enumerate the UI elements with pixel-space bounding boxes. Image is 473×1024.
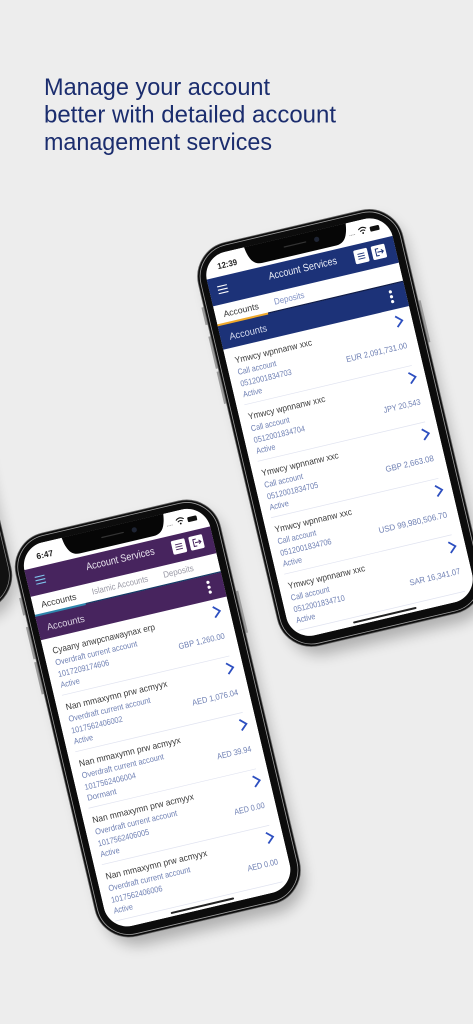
row 3	[259, 428, 439, 518]
row 2: JPY 20,543	[382, 396, 422, 415]
icon: status wifi and battery	[166, 514, 198, 528]
row 5: Call account	[290, 584, 331, 603]
row 5	[286, 541, 466, 631]
phone: blue account services	[188, 202, 473, 664]
icon: menu	[35, 575, 46, 584]
header title: Account Services	[85, 545, 156, 573]
icon: menu	[217, 285, 228, 294]
tab shadow line	[85, 571, 221, 604]
accounts section band	[35, 572, 227, 640]
phone body	[8, 493, 307, 944]
icon: logout button	[188, 534, 205, 551]
row 4: Active	[282, 554, 303, 569]
row 5: Active	[295, 611, 317, 625]
section label: Accounts	[46, 614, 86, 633]
row 3: Dormant	[86, 786, 118, 803]
phone body	[191, 202, 473, 654]
tab: accounts active: Accounts	[222, 301, 260, 319]
row 3	[77, 718, 257, 808]
row 3: Call account	[263, 471, 304, 490]
row 5: 0512001834710	[292, 593, 346, 614]
title: better with detailed account	[44, 102, 336, 128]
row 4: 1017562406005	[97, 827, 150, 848]
screen	[201, 211, 473, 641]
tab: deposits: Deposits	[273, 290, 306, 307]
row 3: 1017562406004	[83, 770, 137, 792]
row 5: Ymwcy wpnnanw xxc	[287, 563, 367, 591]
row 2: AED 1,076.04	[191, 687, 239, 708]
row 3: Overdraft current account	[81, 751, 165, 780]
row 5: Overdraft current account	[107, 864, 192, 893]
header title: Account Services	[267, 255, 338, 283]
screen	[18, 501, 295, 931]
header bar	[24, 526, 216, 597]
status time: 6:47	[35, 548, 54, 561]
row 2: Active	[255, 441, 277, 456]
notch	[244, 223, 346, 264]
accounts section band	[217, 282, 409, 350]
row 2: Overdraft current account	[67, 695, 152, 724]
tab: islamic accounts: Islamic Accounts	[91, 574, 150, 597]
row 3: 0512001834705	[266, 480, 319, 501]
icon: status wifi and battery	[349, 225, 380, 236]
side buttons	[201, 258, 433, 404]
row 4: USD 99,980,506.70	[378, 509, 448, 535]
row 4	[272, 484, 453, 574]
section label: Accounts	[228, 323, 268, 343]
row 1: EUR 2,091,731.00	[345, 340, 408, 364]
tab underline	[217, 312, 268, 326]
menu dots	[206, 580, 212, 594]
row 1	[50, 606, 230, 695]
speaker and camera	[101, 527, 137, 540]
row 1: Overdraft current account	[54, 638, 139, 667]
row 3: Active	[268, 498, 290, 512]
title	[44, 74, 336, 156]
tab: deposits: Deposits	[162, 563, 195, 580]
row 4	[90, 775, 270, 865]
row 4: Ymwcy wpnnanw xxc	[274, 507, 353, 535]
row 3: Nan mmaxymn prw acmyyx	[78, 735, 182, 769]
row 2	[246, 372, 426, 461]
row 1: Active	[242, 385, 263, 399]
row 2: Nan mmaxymn prw acmyyx	[65, 678, 169, 712]
row 4: 0512001834706	[279, 536, 333, 558]
icon: list button	[171, 538, 187, 555]
row 5: SAR 16,341.07	[408, 566, 462, 588]
row 1	[233, 315, 413, 405]
home indicator	[171, 897, 234, 914]
row 1: 0512001834703	[239, 367, 293, 389]
phone: purple account services	[6, 492, 312, 954]
home indicator	[353, 607, 417, 624]
header bar	[207, 236, 399, 306]
row 4: Call account	[276, 527, 318, 546]
row 1: 1017209174606	[57, 657, 110, 679]
icon: logout button	[370, 244, 387, 260]
row 2: Active	[73, 732, 94, 746]
row 2: Ymwcy wpnnanw xxc	[247, 394, 327, 422]
icon: list button	[353, 248, 370, 264]
row 2: 1017562406002	[70, 714, 124, 735]
row 1: Active	[59, 675, 81, 690]
notch	[58, 510, 170, 557]
row 1: GBP 1,260.00	[177, 631, 226, 651]
row 5: 1017562406006	[110, 883, 164, 905]
row 2: Call account	[250, 414, 291, 433]
status time: 12:39	[216, 257, 238, 271]
row 5	[103, 831, 284, 921]
tab shadow line	[268, 281, 403, 314]
row 4: Overdraft current account	[94, 808, 179, 837]
speaker and camera	[284, 236, 320, 248]
row 5: Nan mmaxymn prw acmyyx	[105, 848, 209, 882]
side buttons	[19, 549, 251, 694]
row 2	[63, 662, 244, 752]
row 2: 0512001834704	[253, 423, 306, 445]
tab underline	[35, 603, 86, 617]
row 3: GBP 2,663.08	[384, 453, 435, 474]
row 3: Ymwcy wpnnanw xxc	[260, 450, 340, 478]
menu dots	[388, 290, 395, 304]
row 1: Cyaany anwpcnawaynax erp	[51, 622, 156, 656]
row 3: AED 39.94	[216, 743, 253, 761]
row 4: Active	[99, 845, 121, 859]
title: management services	[44, 129, 272, 156]
row 4: Nan mmaxymn prw acmyyx	[91, 791, 195, 825]
row 4: AED 0.00	[233, 800, 266, 817]
partial phone at left edge	[0, 198, 22, 659]
title: Manage your account	[44, 74, 270, 101]
tab: accounts active: Accounts	[40, 591, 78, 610]
row 1: Call account	[237, 358, 278, 377]
row 5: AED 0.00	[246, 856, 279, 873]
row 1: Ymwcy wpnnanw xxc	[234, 337, 313, 365]
row 5: Active	[113, 901, 134, 916]
